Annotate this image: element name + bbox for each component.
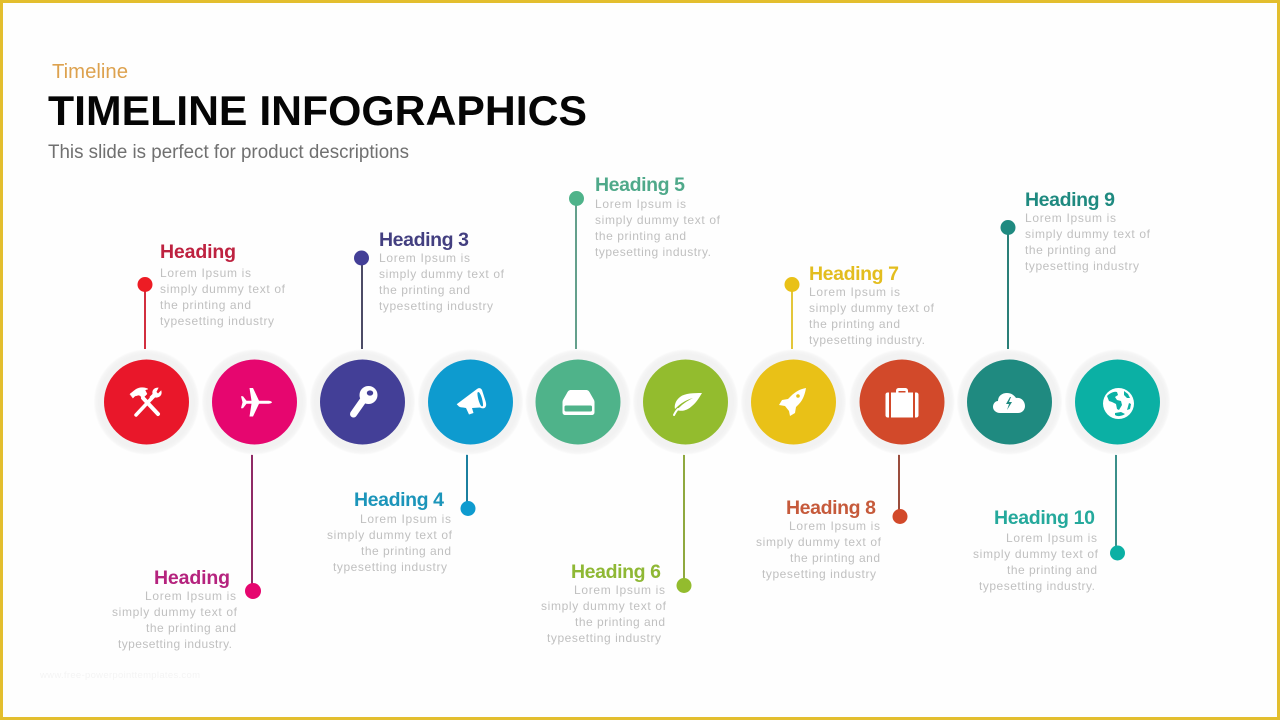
item 10: Heading 10, turquoise: Heading 10 <box>994 507 1095 529</box>
item 9: Heading 9, dark teal: simply dummy text of <box>1025 227 1151 241</box>
item 5: Heading 5, green-teal: simply dummy text of <box>595 213 721 227</box>
item 1: Heading, red: typesetting industry <box>160 314 274 328</box>
item 3: Heading 3, indigo: the printing and <box>379 283 470 297</box>
node 4: megaphone icon on blue circle <box>418 349 524 455</box>
item 8: Heading 8, orange <box>756 453 908 581</box>
item 3: Heading 3, indigo <box>354 229 505 349</box>
node 1: tools icon on red circle <box>94 349 200 455</box>
item 1: Heading, red <box>138 241 286 349</box>
item 4: Heading 4, blue <box>327 453 476 574</box>
item 8: Heading 8, orange: typesetting industry <box>762 567 876 581</box>
item 2: Heading, magenta: typesetting industry. <box>118 637 232 651</box>
item 7: Heading 7, yellow: the printing and <box>809 317 900 331</box>
item 2: Heading, magenta: Lorem Ipsum is <box>145 589 236 603</box>
item 6: Heading 6, lime: the printing and <box>575 615 665 629</box>
item 10: Heading 10, turquoise: the printing and <box>1007 563 1097 577</box>
item 6: Heading 6, lime: Lorem Ipsum is <box>574 583 665 597</box>
item 4: Heading 4, blue: the printing and <box>361 544 451 558</box>
item 1: Heading, red: Heading <box>160 241 236 263</box>
node 7: rocket icon on yellow circle <box>740 349 846 455</box>
item 4: Heading 4, blue: Heading 4 <box>354 489 444 511</box>
item 5: Heading 5, green-teal: Heading 5 <box>595 174 685 196</box>
item 7: Heading 7, yellow <box>784 263 935 349</box>
item 9: Heading 9, dark teal: Heading 9 <box>1025 189 1115 211</box>
item 8: Heading 8, orange: Lorem Ipsum is <box>789 519 880 533</box>
watermark: www.free-powerpointtemplates.com <box>39 670 200 681</box>
node 9: storm cloud icon on dark teal circle <box>956 349 1062 455</box>
item 3: Heading 3, indigo: Lorem Ipsum is <box>379 251 470 265</box>
item 7: Heading 7, yellow: Lorem Ipsum is <box>809 285 900 299</box>
node 2: airplane icon on magenta circle <box>202 349 308 455</box>
item 9: Heading 9, dark teal: typesetting industry <box>1025 259 1139 273</box>
node 6: leaf icon on lime circle <box>632 349 738 455</box>
item 2: Heading, magenta: the printing and <box>146 621 236 635</box>
item 3: Heading 3, indigo: simply dummy text of <box>379 267 505 281</box>
item 3: Heading 3, indigo: Heading 3 <box>379 229 469 251</box>
item 10: Heading 10, turquoise <box>973 453 1125 593</box>
item 10: Heading 10, turquoise: typesetting industry. <box>979 579 1095 593</box>
item 6: Heading 6, lime <box>541 453 692 645</box>
item 9: Heading 9, dark teal <box>1000 189 1151 349</box>
item 2: Heading, magenta: Heading <box>154 567 230 589</box>
node 10: globe icon on turquoise circle <box>1064 349 1170 455</box>
item 10: Heading 10, turquoise: Lorem Ipsum is <box>1006 531 1097 545</box>
item 7: Heading 7, yellow: typesetting industry. <box>809 333 925 347</box>
node 5: drive icon on green circle <box>525 349 631 455</box>
item 8: Heading 8, orange: simply dummy text of <box>756 535 882 549</box>
item 1: Heading, red: simply dummy text of <box>160 282 286 296</box>
item 2: Heading, magenta: simply dummy text of <box>112 605 238 619</box>
item 8: Heading 8, orange: the printing and <box>790 551 880 565</box>
item 5: Heading 5, green-teal <box>569 174 721 349</box>
item 8: Heading 8, orange: Heading 8 <box>786 497 876 519</box>
item 9: Heading 9, dark teal: the printing and <box>1025 243 1116 257</box>
item 4: Heading 4, blue: Lorem Ipsum is <box>360 512 451 526</box>
item 2: Heading, magenta <box>112 453 261 651</box>
title: TIMELINE INFOGRAPHICS <box>48 87 587 134</box>
item 4: Heading 4, blue: simply dummy text of <box>327 528 453 542</box>
item 10: Heading 10, turquoise: simply dummy text of <box>973 547 1099 561</box>
item 4: Heading 4, blue: typesetting industry <box>333 560 447 574</box>
node 8: suitcase icon on orange circle <box>849 349 955 455</box>
item 7: Heading 7, yellow: Heading 7 <box>809 263 899 285</box>
item 5: Heading 5, green-teal: the printing and <box>595 229 686 243</box>
item 1: Heading, red: the printing and <box>160 298 251 312</box>
item 1: Heading, red: Lorem Ipsum is <box>160 266 251 280</box>
item 6: Heading 6, lime: simply dummy text of <box>541 599 667 613</box>
item 6: Heading 6, lime: Heading 6 <box>571 561 661 583</box>
node 3: key icon on indigo circle <box>310 349 416 455</box>
item 6: Heading 6, lime: typesetting industry <box>547 631 661 645</box>
item 3: Heading 3, indigo: typesetting industry <box>379 299 493 313</box>
item 5: Heading 5, green-teal: Lorem Ipsum is <box>595 197 686 211</box>
eyebrow: Timeline: Timeline <box>52 61 128 83</box>
item 7: Heading 7, yellow: simply dummy text of <box>809 301 935 315</box>
subtitle: This slide is perfect for product descriptions <box>48 142 409 163</box>
item 9: Heading 9, dark teal: Lorem Ipsum is <box>1025 211 1116 225</box>
item 5: Heading 5, green-teal: typesetting industry. <box>595 245 711 259</box>
